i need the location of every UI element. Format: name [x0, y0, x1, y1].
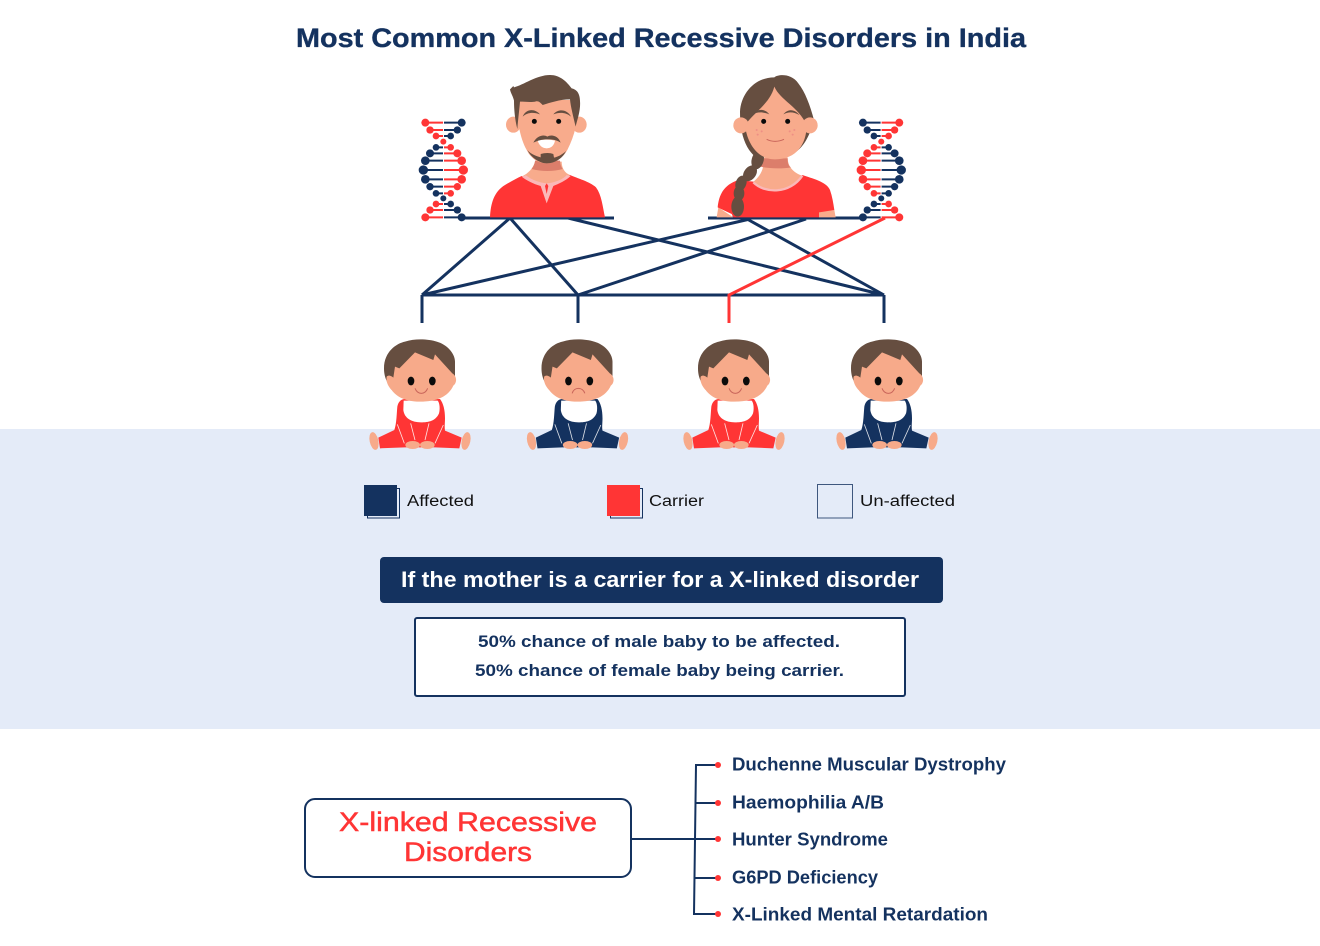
icon: baby 4, affected colour, smiling: [835, 339, 939, 451]
banner heading: If the mother is a carrier for a X-linked disorder: [401, 567, 919, 592]
inheritance lines: [422, 218, 885, 323]
icon: father: [490, 75, 605, 217]
disorder list: G6PD Deficiency: [732, 868, 878, 888]
icon: mother: [717, 75, 836, 217]
disorder list: Duchenne Muscular Dystrophy: [732, 754, 1006, 774]
callout: chance text box: [415, 618, 905, 696]
disorder list: Hunter Syndrome: [732, 830, 888, 850]
icon: baby 2, affected colour, sad: [525, 339, 630, 451]
callout: chance text box: 50% chance of male baby to be affected.: [478, 632, 840, 651]
legend: un-affected: Un-affected: [860, 493, 955, 510]
banner heading: [380, 557, 943, 603]
icon: right DNA helix: [857, 119, 906, 221]
disorder list: X-Linked Mental Retardation: [732, 904, 988, 924]
callout: chance text box: 50% chance of female baby being carrier.: [475, 661, 844, 680]
legend: un-affected: [818, 484, 955, 518]
disorder list: [732, 754, 1006, 924]
tree connector: [631, 762, 721, 917]
legend: affected: Affected: [407, 493, 474, 510]
icon: baby 1, carrier colour, smiling: [368, 339, 472, 451]
panel: X-linked recessive disorders box: [305, 799, 631, 877]
legend: affected: [364, 485, 474, 518]
panel: legend and explanation band: [0, 429, 1320, 729]
icon: left DNA helix: [419, 119, 468, 221]
legend: carrier: Carrier: [649, 493, 704, 510]
icon: baby 3, carrier colour, smiling: [682, 339, 786, 451]
legend: carrier: [607, 485, 704, 518]
panel: X-linked recessive disorders box: X-linked Recessive: [339, 807, 597, 837]
panel: X-linked recessive disorders box: Disorders: [404, 837, 532, 867]
disorder list: Haemophilia A/B: [732, 792, 884, 812]
title: Most Common X-Linked Recessive Disorders in India: [296, 23, 1027, 53]
